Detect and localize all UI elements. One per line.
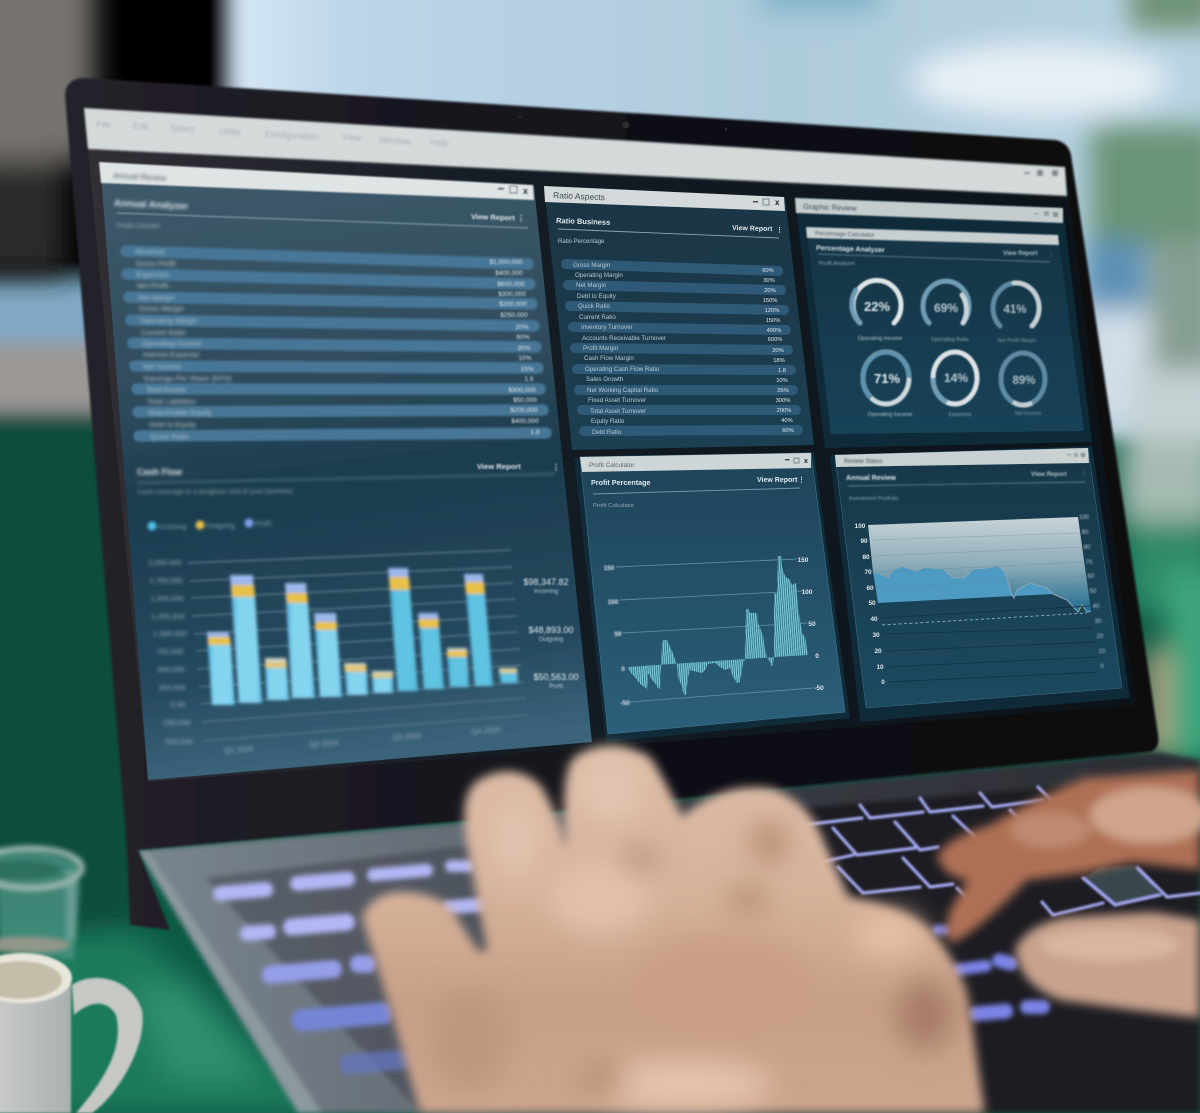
panel: ratio aspects: 60% — [762, 268, 774, 274]
panel: ratio aspects: Net Working Capital Ratio — [587, 387, 659, 394]
legend: Profit — [255, 521, 271, 528]
panel: annual review: 60% — [516, 334, 530, 341]
axis labels: -500,000 — [163, 737, 193, 746]
histogram chart: 150 — [798, 557, 809, 564]
area chart: 60 — [866, 585, 874, 592]
panel: annual review: 15% — [520, 366, 534, 373]
panel: annual review: Operating Margin — [140, 316, 198, 325]
panel: ratio aspects: 10% — [776, 378, 788, 384]
cash flow heading: Cash Flow — [137, 467, 183, 477]
panel: annual review: Quick Ratio — [150, 432, 189, 441]
area chart: 40 — [1093, 604, 1100, 610]
panel: ratio aspects: 600% — [768, 337, 782, 343]
summary values: $98,347.82 — [523, 577, 569, 587]
panel: ratio aspects: 25% — [777, 388, 789, 394]
gauge 69 percent: 69% — [934, 301, 958, 315]
area chart: 20 — [1097, 634, 1104, 640]
summary values — [523, 577, 579, 690]
gauge 69 percent — [923, 281, 969, 343]
gauge 89 percent — [1001, 353, 1045, 417]
histogram chart: 50 — [614, 631, 622, 638]
gauge 71 percent: Operating Income — [868, 412, 912, 418]
area chart: 90 — [860, 538, 868, 545]
axis labels: 750,000 — [156, 647, 184, 656]
panel: ratio aspects: 20% — [772, 348, 784, 354]
panel: annual review: View Report — [471, 212, 515, 223]
stacked bars — [207, 568, 518, 705]
menu bar: Configuration — [265, 129, 319, 142]
histogram chart: 0 — [621, 666, 625, 673]
area chart: 90 — [1082, 530, 1089, 536]
summary values: Profit — [549, 684, 563, 690]
histogram chart: 50 — [808, 621, 816, 628]
panel: annual review: $50,000 — [513, 397, 537, 404]
panel: review status — [830, 446, 1130, 722]
panel: annual review: 1.8 — [530, 429, 540, 436]
area chart: 60 — [1088, 574, 1095, 580]
panel: ratio aspects — [544, 186, 814, 450]
panel: annual review: Shareholder Equity — [148, 408, 212, 417]
panel: annual review: View Report — [477, 462, 521, 471]
panel: profit calculator: Profit Calculator — [593, 503, 634, 509]
area chart: 50 — [1090, 589, 1097, 595]
typing hand: right — [937, 770, 1200, 1018]
panel: profit calculator: Profit Calculator — [589, 462, 635, 469]
panel: profit calculator: Profit Percentage — [591, 478, 651, 487]
panel: annual review: 10% — [518, 355, 532, 362]
histogram chart: 100 — [608, 599, 619, 606]
axis labels: 1,500,000 — [150, 594, 184, 603]
panel: annual review: 1.5 — [524, 376, 534, 383]
panel: ratio aspects: Equity Ratio — [591, 418, 625, 425]
screen — [84, 108, 1136, 782]
area chart — [855, 515, 1106, 686]
axis labels: Q1 2024 — [224, 744, 253, 755]
bar chart grid — [188, 550, 528, 741]
panel: ratio aspects: Ratio Business — [556, 216, 610, 227]
gauge 41 percent: 41% — [1003, 304, 1027, 316]
gauge 22 percent — [852, 280, 902, 342]
histogram chart: 0 — [815, 653, 819, 660]
panel: profit calculator — [574, 452, 850, 742]
histogram chart — [604, 556, 824, 707]
gauge 89 percent: Net Income — [1015, 411, 1041, 417]
panel: profit calculator: ⋮ — [798, 476, 805, 484]
area chart: 100 — [855, 523, 866, 530]
histogram chart: -50 — [620, 700, 630, 707]
panel: annual review: Debt to Equity — [149, 420, 196, 429]
percentage calculator window: Percentage Calculator — [815, 231, 874, 239]
menu bar: File — [96, 119, 111, 130]
menu bar: Help — [430, 137, 449, 148]
cash flow heading — [137, 467, 555, 496]
panel: annual review: Net Margin — [138, 293, 175, 302]
area chart: 80 — [1084, 545, 1091, 551]
panel: annual review: Annual Analyzer — [114, 198, 189, 212]
panel: ratio aspects: Operating Cash Flow Ratio — [585, 366, 660, 373]
panel: ratio aspects: 30% — [763, 278, 775, 284]
panel: graphic review: Graphic Review — [803, 202, 857, 213]
percentage calculator window: View Report — [1003, 251, 1038, 257]
panel: ratio aspects: ⋮ — [776, 226, 783, 234]
area chart: 50 — [868, 600, 876, 607]
panel: ratio aspects: Operating Margin — [575, 272, 623, 279]
area chart: 80 — [862, 554, 870, 561]
gauge 71 percent — [863, 352, 912, 418]
histogram chart: 100 — [802, 589, 813, 596]
gauges — [852, 280, 1039, 344]
axis labels: -250,000 — [161, 718, 191, 727]
area chart: 30 — [872, 632, 880, 639]
menu bar — [84, 108, 1067, 196]
menu bar: Edit — [133, 121, 149, 132]
panel: ratio aspects: 1.8 — [778, 368, 786, 374]
menu bar: Window — [379, 135, 412, 147]
menu bar: View — [342, 132, 362, 143]
histogram chart: 150 — [604, 565, 615, 572]
axis labels: 1,750,000 — [149, 576, 183, 585]
panel: ratio aspects: Cash Flow Margin — [584, 355, 634, 362]
panel: ratio aspects: Accounts Receivable Turnover — [582, 335, 666, 342]
panel: ratio aspects: Quick Ratio — [578, 303, 611, 310]
axis labels: 1,000,000 — [153, 629, 187, 638]
axis labels: 1,250,000 — [151, 612, 185, 621]
panel: annual review: ⋮ — [517, 214, 525, 223]
panel: ratio aspects: Ratio Aspects — [553, 190, 605, 202]
gauge 41 percent: Net Profit Margin — [998, 338, 1037, 344]
area chart: 30 — [1095, 619, 1102, 625]
legend: Incoming — [158, 524, 187, 531]
area chart: 100 — [1079, 515, 1090, 521]
panel: profit calculator: View Report — [757, 477, 798, 484]
right keyboard glow keys — [932, 925, 1050, 1022]
panel: ratio aspects: Profit Margin — [583, 345, 619, 352]
panel: ratio aspects: Ratio Percentage — [558, 239, 605, 245]
panel: ratio aspects: View Report — [732, 225, 773, 233]
area chart: 10 — [1099, 649, 1106, 655]
window controls: x — [523, 186, 528, 196]
gauge 22 percent: 22% — [864, 299, 890, 314]
axis labels: Q2 2024 — [309, 738, 338, 749]
panel: ratio aspects: 400% — [767, 328, 781, 334]
panel: ratio aspects: 200% — [777, 408, 791, 414]
panel: annual review: Total Liabilities — [147, 397, 196, 406]
panel: annual review: Profit Counter — [117, 223, 161, 230]
panel: annual review: Net Profit — [137, 281, 169, 290]
laptop base and keyboard — [136, 752, 1200, 1113]
gauge 89 percent: 89% — [1012, 375, 1036, 387]
percentage calculator window: Percentage Analyzer — [816, 245, 885, 254]
legend — [148, 518, 271, 531]
panel: ratio aspects: 150% — [766, 318, 780, 324]
panel: annual review: $600,000 — [497, 281, 525, 288]
panel: ratio aspects: Debt to Equity — [577, 293, 617, 300]
panel: review status: View Report — [1031, 471, 1067, 478]
summary values: Outgoing — [539, 637, 563, 643]
panel: ratio aspects: Debt Ratio — [592, 429, 622, 436]
annual rows — [126, 251, 546, 436]
panel: ratio aspects: 300% — [776, 398, 790, 404]
ratio rows — [566, 264, 798, 431]
gauge 14 percent: 14% — [944, 371, 968, 385]
panel: annual review: $300,000 — [498, 291, 526, 298]
panel: profit calculator: x — [804, 458, 808, 465]
panel: annual review: Current Ratio — [141, 328, 186, 337]
summary values: Incoming — [534, 589, 558, 595]
panel: annual review: $400,000 — [511, 418, 539, 425]
area chart: 0 — [1100, 664, 1104, 670]
panel: ratio aspects: 60% — [782, 428, 794, 434]
summary values: $48,893.00 — [528, 625, 574, 635]
panel: annual review: $200,000 — [499, 301, 527, 308]
gauge 71 percent: 71% — [874, 371, 900, 386]
panel: review status: Review Status — [844, 459, 882, 465]
hand shading — [430, 760, 953, 1109]
legend: Outgoing — [206, 523, 235, 530]
gauge 14 percent: Expenses — [949, 412, 972, 418]
panel: ratio aspects: 18% — [773, 358, 785, 364]
panel: annual review: 30% — [517, 345, 531, 352]
gauge 14 percent — [933, 352, 977, 418]
typing hand: left — [362, 746, 985, 1113]
area chart: 70 — [864, 569, 872, 576]
panel: review status: ⋮ — [1081, 471, 1088, 478]
axis labels: Q4 2024 — [471, 725, 500, 736]
panel: graphic review — [795, 197, 1092, 448]
gauge 22 percent: Operating Income — [858, 336, 902, 342]
summary values: $50,563.00 — [533, 672, 579, 682]
window controls — [498, 186, 528, 196]
panel: annual review: Net Income — [143, 362, 181, 371]
panel: ratio aspects: Inventory Turnover — [581, 324, 633, 331]
panel: ratio aspects: Current Ratio — [579, 314, 616, 321]
glass — [0, 848, 82, 960]
panel: ratio aspects: Gross Margin — [573, 262, 611, 269]
axis labels: 2,000,000 — [148, 558, 182, 567]
green table — [0, 930, 330, 1113]
menu bar: Utility — [219, 126, 242, 137]
panel: review status: Annual Review — [846, 475, 896, 482]
axis labels: 0.00 — [171, 700, 185, 709]
panel: annual review: 20% — [515, 324, 529, 331]
panel: annual review: Gross Margin — [139, 304, 184, 313]
panel: annual review: Interest Expense — [143, 350, 199, 359]
panel: annual review: $250,000 — [500, 312, 528, 319]
axis labels: 250,000 — [158, 683, 186, 692]
gauge 69 percent: Operating Ratio — [931, 337, 969, 343]
panel: ratio aspects: Fixed Asset Turnover — [588, 397, 646, 404]
gauge 41 percent — [993, 283, 1039, 344]
menu bar: Select — [170, 123, 196, 134]
left keyboard backlit keys — [213, 860, 489, 1075]
area chart: 20 — [874, 648, 882, 655]
panel: ratio aspects: 40% — [781, 418, 793, 424]
panel: ratio aspects: x — [775, 198, 780, 207]
panel: annual review: Expenses — [136, 270, 169, 279]
area chart: 0 — [881, 679, 885, 686]
coffee mug — [0, 953, 143, 1113]
panel: ratio aspects: 20% — [764, 288, 776, 294]
panel: ratio aspects: 150% — [763, 298, 777, 304]
panel: annual review: $400,000 — [495, 270, 523, 277]
panel: annual review: Operating Income — [142, 339, 202, 348]
panel: ratio aspects: Sales Growth — [586, 376, 624, 383]
panel: review status: Investment Portfolio — [849, 496, 898, 502]
panel: annual review: Earnings Per Share (EPS) — [144, 374, 232, 383]
panel: ratio aspects: 120% — [765, 308, 779, 314]
panel: annual review: Revenue — [135, 247, 165, 256]
panel: annual review: $300,000 — [508, 387, 536, 394]
panel: annual review: Gross Profit — [136, 259, 177, 268]
axis labels: Q3 2024 — [392, 731, 421, 742]
panel: annual review: Annual Review — [113, 171, 167, 183]
panel: annual review: $1,000,000 — [489, 259, 523, 266]
cash flow heading: Cash coverage in a progress and of your business — [137, 488, 294, 496]
percentage calculator window — [806, 227, 1084, 434]
panel: annual review: Total Assets — [146, 385, 186, 394]
axis labels: 500,000 — [157, 665, 185, 674]
percentage calculator window: ⋮ — [1048, 252, 1054, 258]
area chart: 40 — [870, 616, 878, 623]
right keyboard keys — [803, 787, 1200, 915]
histogram chart: -50 — [814, 685, 824, 692]
percentage calculator window: Profit Analyzer — [819, 261, 855, 267]
panel: annual review: $200,000 — [510, 407, 538, 414]
panel: ratio aspects: Net Margin — [576, 282, 607, 289]
panel: annual review: ⋮ — [552, 463, 560, 472]
area chart: 70 — [1086, 560, 1093, 566]
panel: ratio aspects: Total Asset Turnover — [590, 408, 646, 415]
panel: annual review — [99, 162, 592, 780]
webcam — [519, 116, 727, 130]
blurred shelves and foliage — [0, 0, 1200, 760]
area chart: 10 — [876, 664, 884, 671]
laptop lid bezel — [65, 78, 1158, 930]
axis labels — [148, 558, 500, 755]
